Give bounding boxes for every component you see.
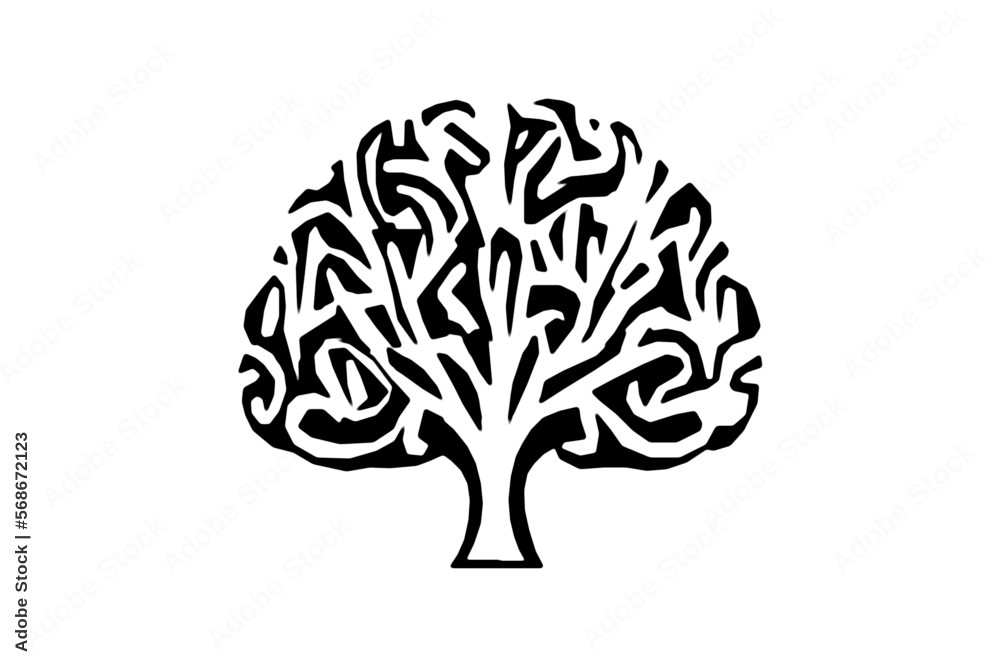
vertical stock credit: Adobe Stock | #568672123 — [12, 432, 31, 652]
watermark: Adobe Stock pattern: Adobe Stock — [14, 509, 173, 657]
lower-right canopy and trunk — [500, 327, 762, 567]
watermark: Adobe Stock pattern: Adobe Stock — [629, 0, 788, 147]
lower-left canopy and trunk — [238, 330, 500, 567]
watermark: Adobe Stock pattern: Adobe Stock — [289, 0, 448, 147]
watermark: Adobe Stock pattern: Adobe Stock — [574, 509, 733, 657]
watermark: Adobe Stock pattern: Adobe Stock — [34, 369, 193, 517]
watermark: Adobe Stock pattern: Adobe Stock — [814, 0, 973, 147]
watermark: Adobe Stock pattern: Adobe Stock — [834, 239, 993, 387]
watermark: Adobe Stock pattern: Adobe Stock — [154, 434, 313, 582]
watermark: Adobe Stock pattern: Adobe Stock — [149, 84, 308, 232]
upper-left canopy — [274, 101, 489, 320]
upper-right canopy — [505, 99, 728, 315]
watermark: Adobe Stock pattern: Adobe Stock — [824, 434, 983, 582]
left lower-canopy detail — [244, 240, 373, 380]
watermark: Adobe Stock pattern: Adobe Stock — [814, 104, 973, 252]
watermark: Adobe Stock pattern: Adobe Stock — [694, 389, 853, 537]
right canopy edge — [713, 275, 760, 380]
right-centre branches — [580, 218, 692, 353]
watermark: Adobe Stock pattern: Adobe Stock — [199, 509, 358, 657]
central canopy branches — [380, 227, 620, 420]
left-centre branches — [364, 230, 423, 347]
watermark: Adobe Stock pattern: Adobe Stock — [689, 59, 848, 207]
watermark: Adobe Stock pattern: Adobe Stock — [24, 34, 183, 182]
